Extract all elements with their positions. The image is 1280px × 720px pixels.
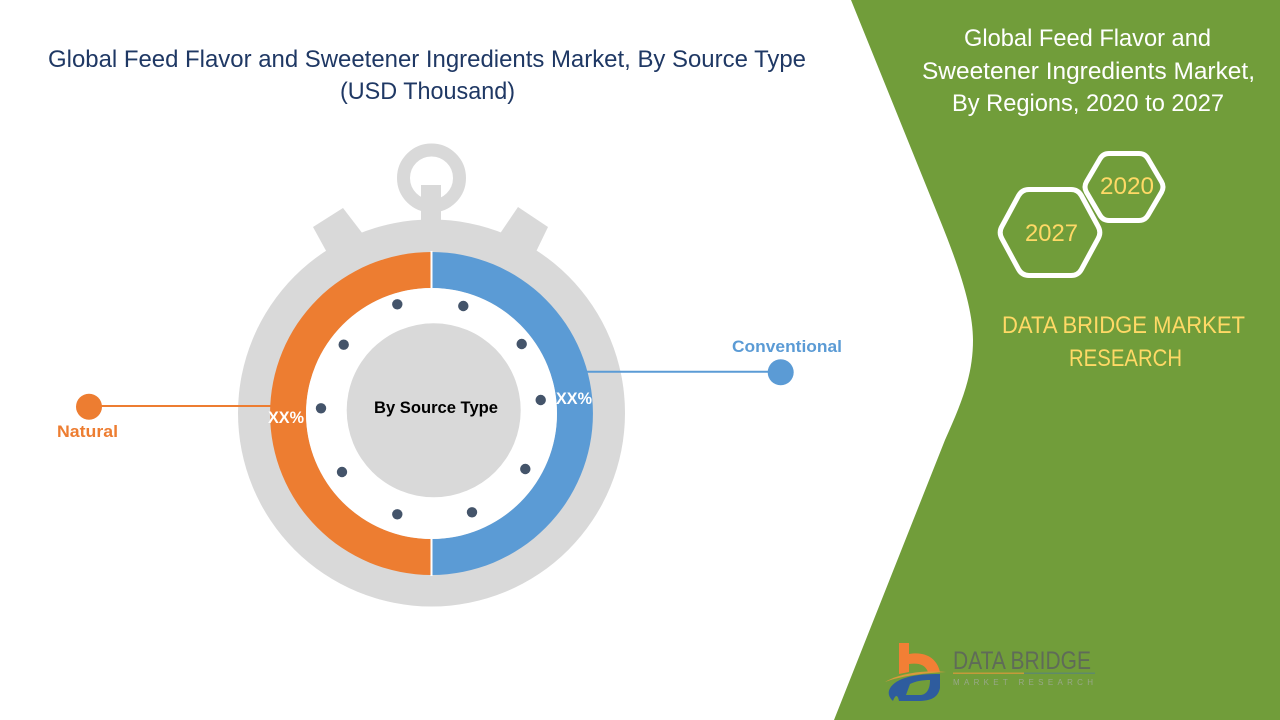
brand text — [1002, 312, 1245, 372]
title: Global Feed Flavor and Sweetener Ingredients Market, By Source Type — [48, 46, 806, 73]
dial tick dots — [316, 299, 546, 520]
centre hub — [347, 323, 521, 497]
stopwatch chart — [238, 150, 625, 606]
donut segment: Conventional — [432, 252, 593, 575]
sidebar heading — [922, 25, 1255, 117]
stopwatch body — [238, 220, 625, 606]
stopwatch crown ring — [404, 150, 460, 206]
Conventional marker — [768, 359, 794, 385]
Natural label: Natural — [57, 422, 118, 441]
brand text: DATA BRIDGE MARKET — [1002, 312, 1245, 339]
sidebar heading: By Regions, 2020 to 2027 — [952, 90, 1224, 117]
Natural leader line — [95, 405, 272, 407]
title — [48, 46, 806, 105]
logo tagline: MARKET RESEARCH — [953, 678, 1093, 687]
hexagon: 2020: 2020 — [1100, 173, 1154, 200]
stopwatch right button — [497, 207, 548, 258]
logo: Data Bridge — [885, 643, 1095, 701]
logo icon: swoosh — [885, 671, 946, 682]
logo icon: orange b — [899, 643, 940, 674]
hexagon: 2027: 2027 — [1025, 220, 1078, 247]
hexagon: 2020 — [1085, 154, 1163, 220]
centre label: By Source Type — [374, 398, 498, 417]
title: (USD Thousand) — [340, 78, 515, 105]
logo underline right — [1024, 672, 1095, 674]
hexagon: 2027 — [1000, 190, 1100, 276]
Conventional value: XX% — [556, 389, 592, 408]
white dial face — [306, 288, 557, 539]
donut divider — [430, 251, 432, 576]
brand text: RESEARCH — [1069, 345, 1182, 372]
Natural marker — [76, 394, 102, 420]
logo wordmark: DATA BRIDGE — [953, 647, 1091, 675]
logo underline left — [953, 672, 1024, 674]
sidebar heading: Sweetener Ingredients Market, — [922, 58, 1255, 85]
stopwatch stem — [421, 185, 441, 230]
logo icon: blue D — [889, 674, 940, 701]
Conventional leader line — [587, 371, 775, 373]
Conventional label: Conventional — [732, 337, 842, 356]
Natural value: XX% — [268, 408, 304, 427]
callout: Natural — [57, 394, 304, 441]
callout: Conventional — [556, 337, 842, 408]
donut segment: Natural — [270, 252, 432, 575]
stopwatch left button — [313, 208, 366, 258]
panel: green regions sidebar — [834, 0, 1280, 720]
sidebar heading: Global Feed Flavor and — [964, 25, 1211, 52]
